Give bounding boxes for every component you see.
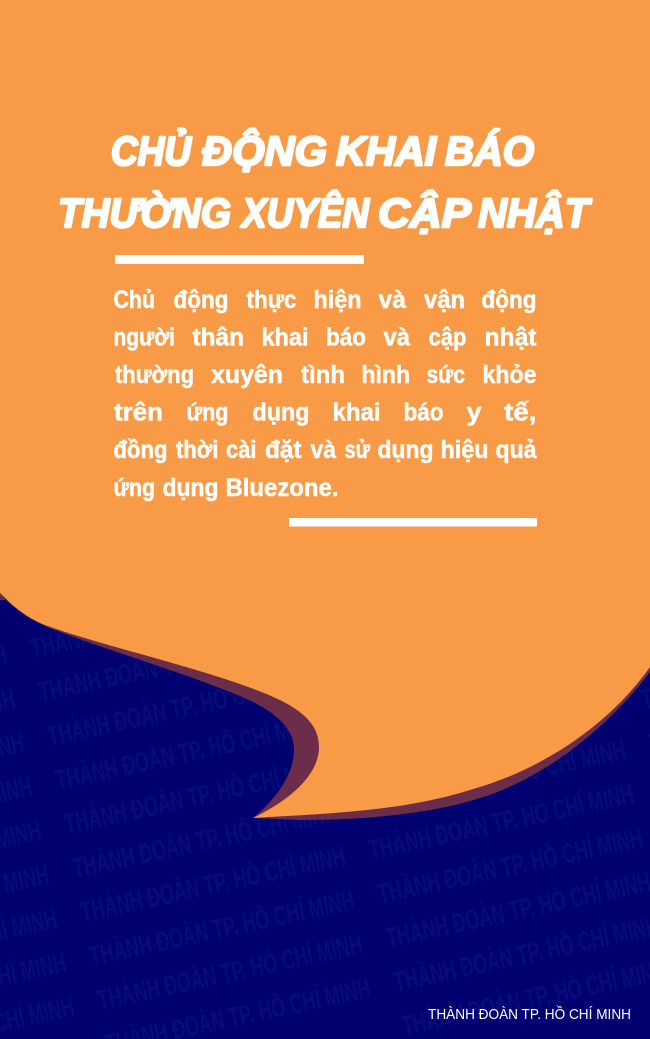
body text: tình xyxy=(301,361,345,389)
watermark pattern: THÀNH ĐOÀN TP. HỒ CHÍ MINH xyxy=(28,577,298,664)
title xyxy=(58,128,592,236)
body text: sức xyxy=(426,361,465,389)
speech bubble panel xyxy=(0,0,650,818)
body text: thực xyxy=(246,286,297,314)
footer credit: THÀNH ĐOÀN TP. HỒ CHÍ MINH xyxy=(428,1005,631,1023)
body text: Chủ xyxy=(114,286,155,314)
body text: thời xyxy=(176,436,218,464)
body text: trên xyxy=(114,398,163,426)
top divider bar xyxy=(115,255,364,264)
title: NHẬT xyxy=(478,190,592,236)
watermark pattern xyxy=(0,408,650,1039)
bottom divider bar xyxy=(289,518,537,526)
body text: Bluezone. xyxy=(226,474,338,502)
body text: dụng xyxy=(252,398,310,426)
title: XUYÊN xyxy=(240,190,370,236)
body text: dụng xyxy=(378,436,434,464)
title: KHAI xyxy=(336,128,438,174)
title: CẬP xyxy=(378,190,472,236)
body text: dụng xyxy=(162,474,218,502)
watermark pattern: THÀNH ĐOÀN TP. HỒ CHÍ MINH xyxy=(36,621,306,708)
watermark pattern: THÀNH ĐOÀN TP. HỒ CHÍ MINH xyxy=(78,841,348,928)
body text: ứng xyxy=(114,474,155,502)
body text: báo xyxy=(326,324,366,352)
watermark pattern: THÀNH ĐOÀN TP. HỒ CHÍ MINH xyxy=(45,665,315,752)
title: CHỦ xyxy=(111,128,192,174)
title: THƯỜNG xyxy=(58,190,231,236)
body text: khỏe xyxy=(482,361,537,389)
body text: thân xyxy=(192,324,244,352)
body text: động xyxy=(174,286,228,314)
title: ĐỘNG xyxy=(202,128,327,174)
body text: đồng xyxy=(114,436,168,464)
body text: và xyxy=(378,286,406,314)
body text: hiệu xyxy=(440,436,488,464)
body text xyxy=(114,286,538,502)
body text: động xyxy=(482,286,536,314)
body text: sử xyxy=(344,436,371,464)
body text: báo xyxy=(404,398,444,426)
watermark pattern: THÀNH ĐOÀN TP. HỒ CHÍ MINH xyxy=(62,753,332,840)
body text: người xyxy=(114,324,175,352)
body text: cài xyxy=(226,436,256,464)
watermark pattern: THÀNH ĐOÀN TP. HỒ CHÍ MINH xyxy=(70,797,340,884)
body text: cập xyxy=(428,324,466,352)
body text: hình xyxy=(362,361,410,389)
body text: thường xyxy=(115,361,194,389)
body text: nhật xyxy=(484,324,537,352)
body text: tế, xyxy=(504,398,536,426)
body text: đặt xyxy=(265,436,302,464)
watermark pattern: THÀNH ĐOÀN TP. HỒ CHÍ MINH xyxy=(53,709,323,796)
speech bubble shadow xyxy=(0,593,650,820)
body text: hiện xyxy=(314,286,362,314)
body text: y xyxy=(466,398,482,426)
title: BÁO xyxy=(445,128,534,174)
watermark pattern: THÀNH ĐOÀN TP. HỒ CHÍ MINH xyxy=(95,929,365,1016)
watermark pattern: THÀNH ĐOÀN TP. HỒ CHÍ MINH xyxy=(20,533,290,620)
watermark pattern: THÀNH ĐOÀN TP. HỒ CHÍ MINH xyxy=(87,885,357,972)
body text: quả xyxy=(496,436,538,464)
body text: và xyxy=(310,436,336,464)
body text: vận xyxy=(424,286,465,314)
body text: ứng xyxy=(186,398,228,426)
body text: và xyxy=(384,324,410,352)
body text: khai xyxy=(262,324,308,352)
body text: xuyên xyxy=(211,361,283,389)
body text: khai xyxy=(332,398,380,426)
